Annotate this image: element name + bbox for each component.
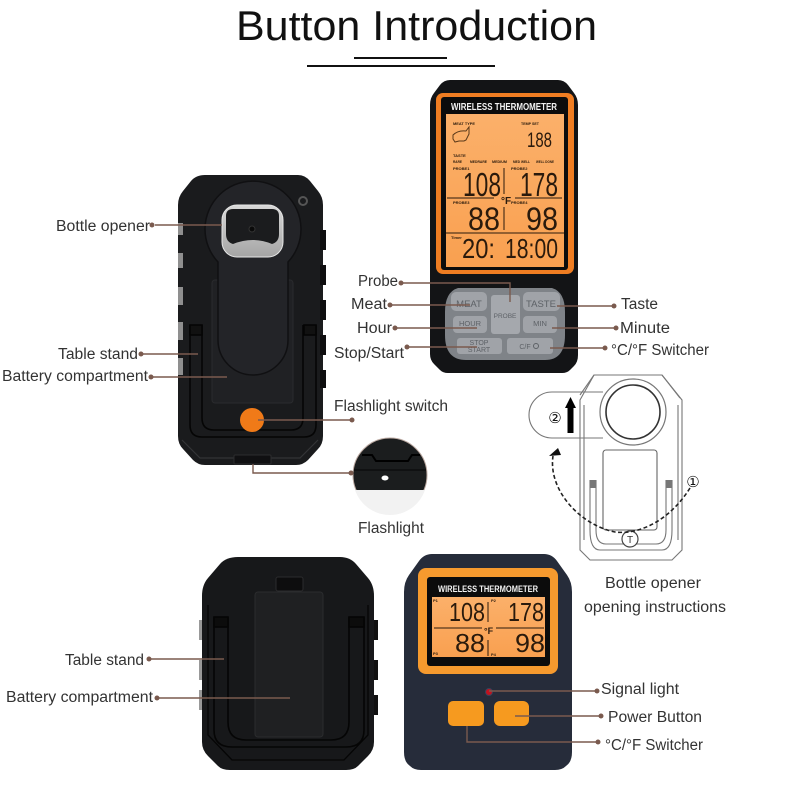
flashlight switch button (240, 408, 264, 432)
LCD screen: 108 (449, 597, 485, 627)
label: stop/start: Stop/Start (334, 345, 405, 362)
LCD screen: RARE (453, 159, 462, 164)
panel: flashlight close-up (353, 438, 427, 515)
panel: front of thermometer (430, 80, 578, 373)
title: Button Introduction (236, 2, 597, 49)
keypad: C/F (519, 344, 531, 351)
orange bezel (436, 93, 574, 274)
step 2 marker: ② (548, 409, 562, 427)
label: taste: Taste (621, 296, 658, 313)
keypad (445, 288, 565, 360)
label: temperature switcher lower: °C/°F Switcher (605, 737, 703, 754)
LCD screen: MED WELL (513, 159, 530, 164)
bottle opener strap (205, 181, 301, 375)
title underline (307, 58, 495, 66)
LCD screen: °F (484, 626, 494, 636)
LCD screen: PROBE1 (453, 166, 470, 171)
label: bottle opener: Bottle opener (56, 218, 150, 235)
LCD screen: PROBE4 (511, 200, 528, 205)
table stand (190, 325, 316, 437)
keypad: STOP (470, 340, 489, 347)
LCD screen: 98 (526, 201, 558, 237)
label: probe: Probe (358, 273, 398, 290)
label: bottle opener opening instructions: opening instructions (584, 599, 726, 616)
LCD screen: Timer (451, 235, 462, 240)
LCD screen: 178 (508, 597, 544, 627)
panel: opening instructions diagram (529, 375, 700, 560)
LCD screen: MEAT TYPE (453, 121, 475, 126)
LCD screen: TASTE (453, 153, 466, 158)
keypad: START (468, 347, 491, 354)
battery compartment (212, 280, 293, 403)
animal icon (453, 127, 469, 142)
LCD screen: MEDRARE (470, 159, 487, 164)
label: table stand: Table stand (58, 346, 138, 363)
panel: back of thermometer with bottle opener (178, 175, 326, 465)
LCD screen: P2 (491, 598, 497, 603)
LCD screen: 18:00 (505, 233, 558, 264)
compartment (603, 450, 657, 530)
LCD screen (432, 597, 545, 658)
up arrow (565, 397, 576, 433)
LCD screen: P4 (491, 652, 497, 657)
orange bezel (418, 568, 558, 674)
label: flashlight switch: Flashlight switch (334, 398, 448, 415)
LCD screen: 98 (515, 628, 545, 658)
dashed rotation arrow (552, 456, 690, 532)
LCD screen: 178 (520, 166, 558, 203)
opener circle (600, 379, 666, 445)
LCD screen: 88 (455, 628, 485, 658)
step 1 marker: ① (686, 473, 700, 491)
LCD screen: 88 (468, 201, 500, 237)
LCD screen: MEDIUM (492, 159, 508, 164)
LCD screen (446, 114, 564, 267)
panel: front of sensor unit (404, 554, 572, 770)
label: power button: Power Button (608, 709, 702, 726)
label: signal light: Signal light (601, 681, 680, 698)
keypad: HOUR (459, 319, 482, 328)
LCD screen: 108 (463, 166, 501, 203)
panel: back of sensor unit (199, 557, 378, 770)
label: table stand lower: Table stand (65, 652, 144, 669)
C/F button (448, 701, 484, 726)
LCD screen: 188 (527, 129, 552, 152)
power button (494, 701, 529, 726)
battery compartment (255, 592, 323, 737)
panel: opening instructions diagram: T (627, 535, 633, 546)
LCD screen: P3 (433, 651, 439, 656)
label: battery compartment: Battery compartment (2, 368, 149, 385)
device heading: WIRELESS THERMOMETER (438, 584, 538, 594)
opener tab (529, 392, 603, 438)
clip tab (276, 577, 303, 591)
signal light (486, 688, 492, 696)
LCD screen: 20: (462, 233, 495, 264)
label: bottle opener opening instructions: Bottle opener (605, 575, 701, 592)
label: meat: Meat (351, 296, 388, 313)
table stand (214, 617, 364, 747)
LCD screen: PROBE3 (453, 200, 470, 205)
label: flashlight: Flashlight (358, 520, 425, 537)
keypad: PROBE (494, 313, 517, 320)
LCD screen: °F (501, 196, 511, 207)
keypad: MEAT (456, 299, 482, 310)
leader lines (138, 222, 618, 744)
label: temperature switcher: °C/°F Switcher (611, 342, 709, 359)
LCD screen: WELL DONE (536, 159, 554, 164)
device heading: WIRELESS THERMOMETER (451, 101, 557, 113)
label: minute: Minute (620, 320, 670, 337)
label: bottle opener opening instructions (584, 575, 726, 616)
screw icon (299, 197, 307, 205)
bottle opener ring (222, 205, 283, 257)
keypad: TASTE (526, 299, 556, 310)
label: battery compartment lower: Battery compartment (6, 689, 154, 706)
label: hour: Hour (357, 320, 392, 337)
bottom notch (234, 455, 271, 464)
keypad: MIN (533, 319, 547, 328)
LCD screen: TEMP SET (521, 121, 539, 126)
LCD screen: PROBE2 (511, 166, 528, 171)
LCD screen: P1 (433, 598, 439, 603)
